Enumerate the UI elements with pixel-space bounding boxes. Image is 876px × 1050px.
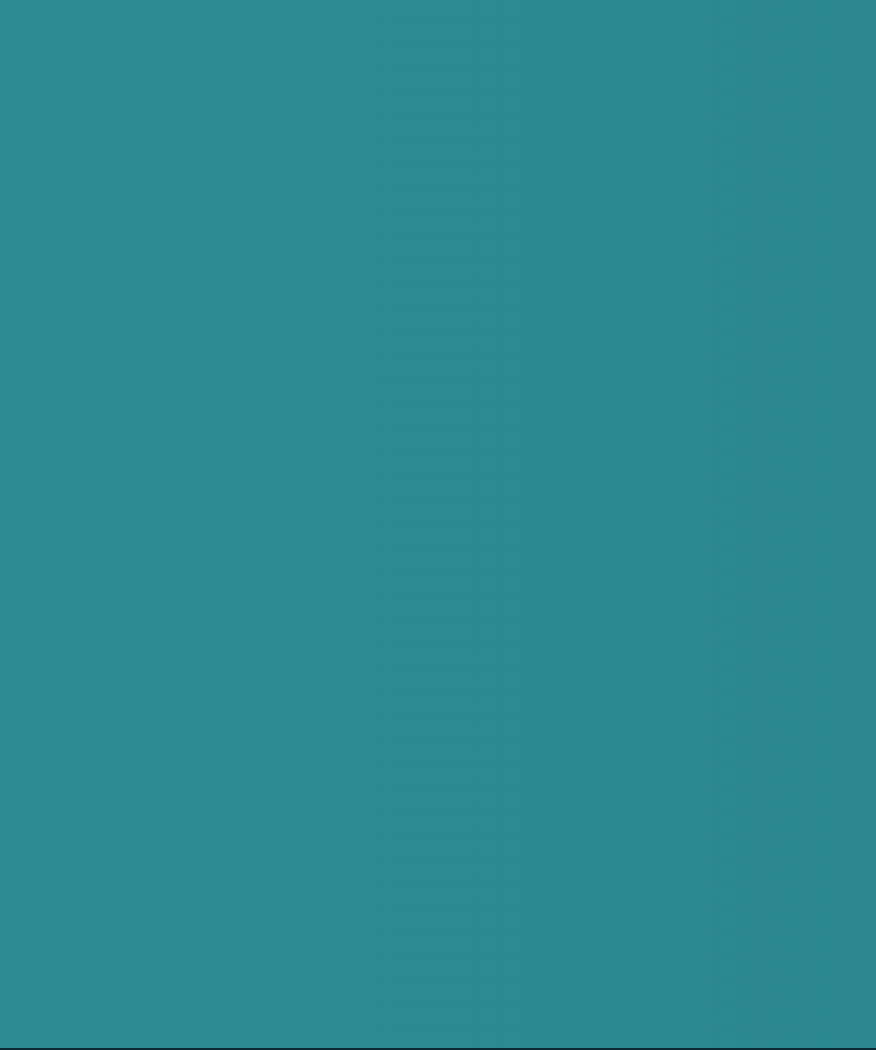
bottom edge line	[0, 1048, 876, 1050]
